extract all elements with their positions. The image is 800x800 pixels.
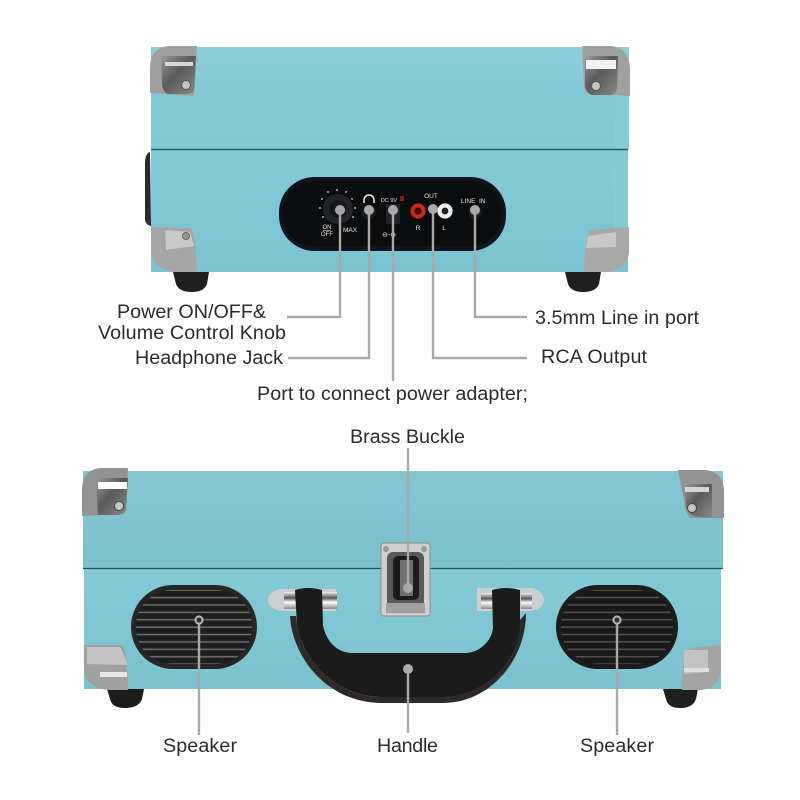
volume knob	[319, 189, 356, 224]
handle	[290, 588, 526, 703]
callout: right speaker	[613, 616, 621, 735]
callout: line in	[470, 205, 527, 317]
corner top left	[150, 46, 197, 96]
corner top right	[582, 46, 630, 96]
port labels: LINE	[461, 198, 476, 205]
port labels	[416, 193, 486, 232]
foot right	[565, 272, 601, 292]
label: rca output: RCA Output	[541, 346, 648, 368]
label: right speaker: Speaker	[580, 735, 654, 757]
brass buckle	[381, 543, 430, 616]
headphone icon	[364, 195, 374, 203]
callout: left speaker	[195, 616, 203, 735]
foot right	[663, 689, 698, 708]
dc jack: DC 9V	[381, 198, 397, 204]
handle mount right	[477, 588, 544, 611]
case body	[151, 150, 628, 272]
label: brass buckle: Brass Buckle	[350, 426, 465, 448]
port labels: OUT	[424, 193, 438, 200]
side knob	[145, 152, 151, 226]
callout: handle	[403, 664, 413, 733]
callout: volume knob	[287, 205, 345, 317]
case lid	[151, 47, 629, 149]
knob labels: ON	[322, 225, 332, 231]
top unit: turntable rear view	[145, 46, 630, 292]
foot left	[173, 272, 209, 292]
lid seam	[83, 568, 723, 570]
dc jack: ⊖-⊕	[382, 232, 396, 239]
port labels: IN	[479, 198, 486, 205]
label: volume control knob: Volume Control Knob	[98, 322, 286, 344]
foot left	[107, 689, 144, 708]
label: power and volume: Power ON/OFF&	[117, 301, 266, 323]
speaker left	[131, 585, 257, 669]
label: headphone jack: Headphone Jack	[135, 347, 283, 369]
bottom unit: turntable front view	[82, 468, 724, 708]
label: handle: Handle	[377, 735, 438, 757]
corner bottom left	[151, 227, 198, 272]
dc jack	[381, 196, 404, 239]
case lid	[83, 471, 723, 568]
corner top left	[82, 468, 128, 516]
knob labels: OFF	[321, 232, 333, 238]
port labels: R	[416, 225, 421, 232]
knob labels: MAX	[343, 227, 358, 234]
handle mount left	[268, 589, 337, 611]
corner bottom right	[682, 645, 721, 690]
rca white	[437, 203, 453, 219]
label: power adapter port: Port to connect power adapter;	[257, 383, 528, 405]
callout: rca output	[428, 204, 527, 358]
knob labels	[321, 225, 358, 238]
speaker right	[556, 585, 678, 669]
headphone jack	[362, 205, 376, 219]
corner bottom left	[84, 645, 128, 690]
line in jack	[468, 205, 482, 219]
label: line in port: 3.5mm Line in port	[535, 307, 700, 329]
case body	[84, 569, 721, 689]
control panel	[279, 177, 506, 251]
corner bottom right	[584, 227, 629, 272]
callout: brass buckle	[403, 448, 413, 593]
port labels: L	[442, 225, 446, 232]
corner top right	[678, 470, 724, 518]
rca red	[410, 203, 426, 219]
callout: headphone jack	[288, 205, 374, 358]
label: left speaker: Speaker	[163, 735, 237, 757]
lid seam	[151, 148, 628, 150]
callout: power port	[388, 205, 398, 381]
